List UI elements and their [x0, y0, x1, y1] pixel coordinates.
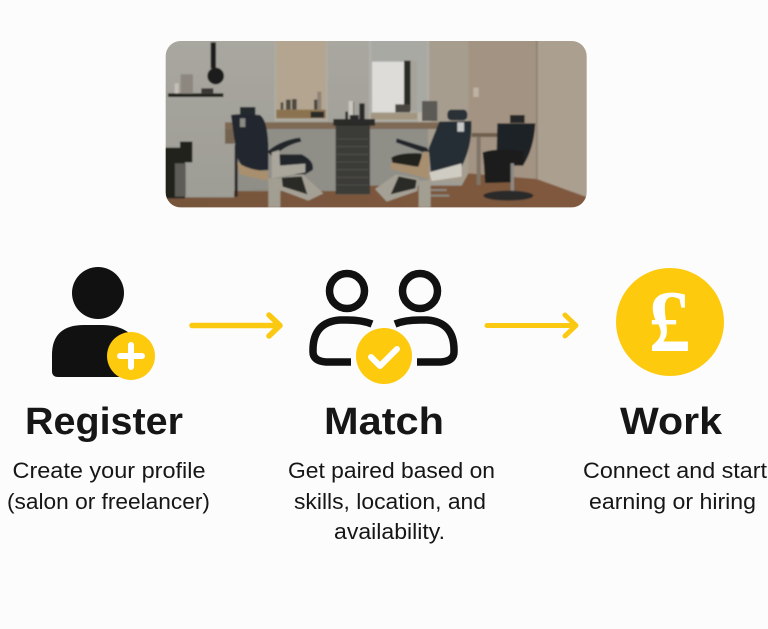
icon: pound coin: £ — [648, 274, 690, 371]
text: work description: Connect and start — [583, 458, 767, 483]
text: match description — [288, 458, 495, 544]
text: match description: availability. — [334, 519, 445, 544]
text: register description — [7, 458, 210, 514]
text: work description: earning or hiring — [589, 489, 756, 514]
heading: match: Match — [324, 401, 444, 443]
text: register description: Create your profile — [12, 458, 206, 483]
heading: register: Register — [25, 401, 183, 443]
arrow: match to work — [487, 315, 576, 336]
text: register description: (salon or freelancer) — [7, 489, 210, 514]
icon: pound coin — [616, 268, 724, 376]
heading: work: Work — [620, 401, 723, 443]
text: match description: Get paired based on — [288, 458, 495, 483]
step: work — [583, 401, 767, 514]
chair left — [235, 145, 238, 197]
icon: person with plus — [52, 267, 155, 380]
text: match description: skills, location, and — [294, 489, 486, 514]
chair right — [447, 110, 467, 120]
photo: barbershop interior — [166, 41, 587, 208]
step: match — [288, 401, 495, 544]
shelf — [168, 93, 223, 97]
arrow: register to match — [192, 315, 280, 336]
chair back right — [472, 133, 502, 137]
icon: paired people with check — [313, 274, 454, 384]
step: register — [7, 401, 210, 514]
counter and cabinet — [225, 122, 443, 129]
text: work description — [583, 458, 767, 514]
